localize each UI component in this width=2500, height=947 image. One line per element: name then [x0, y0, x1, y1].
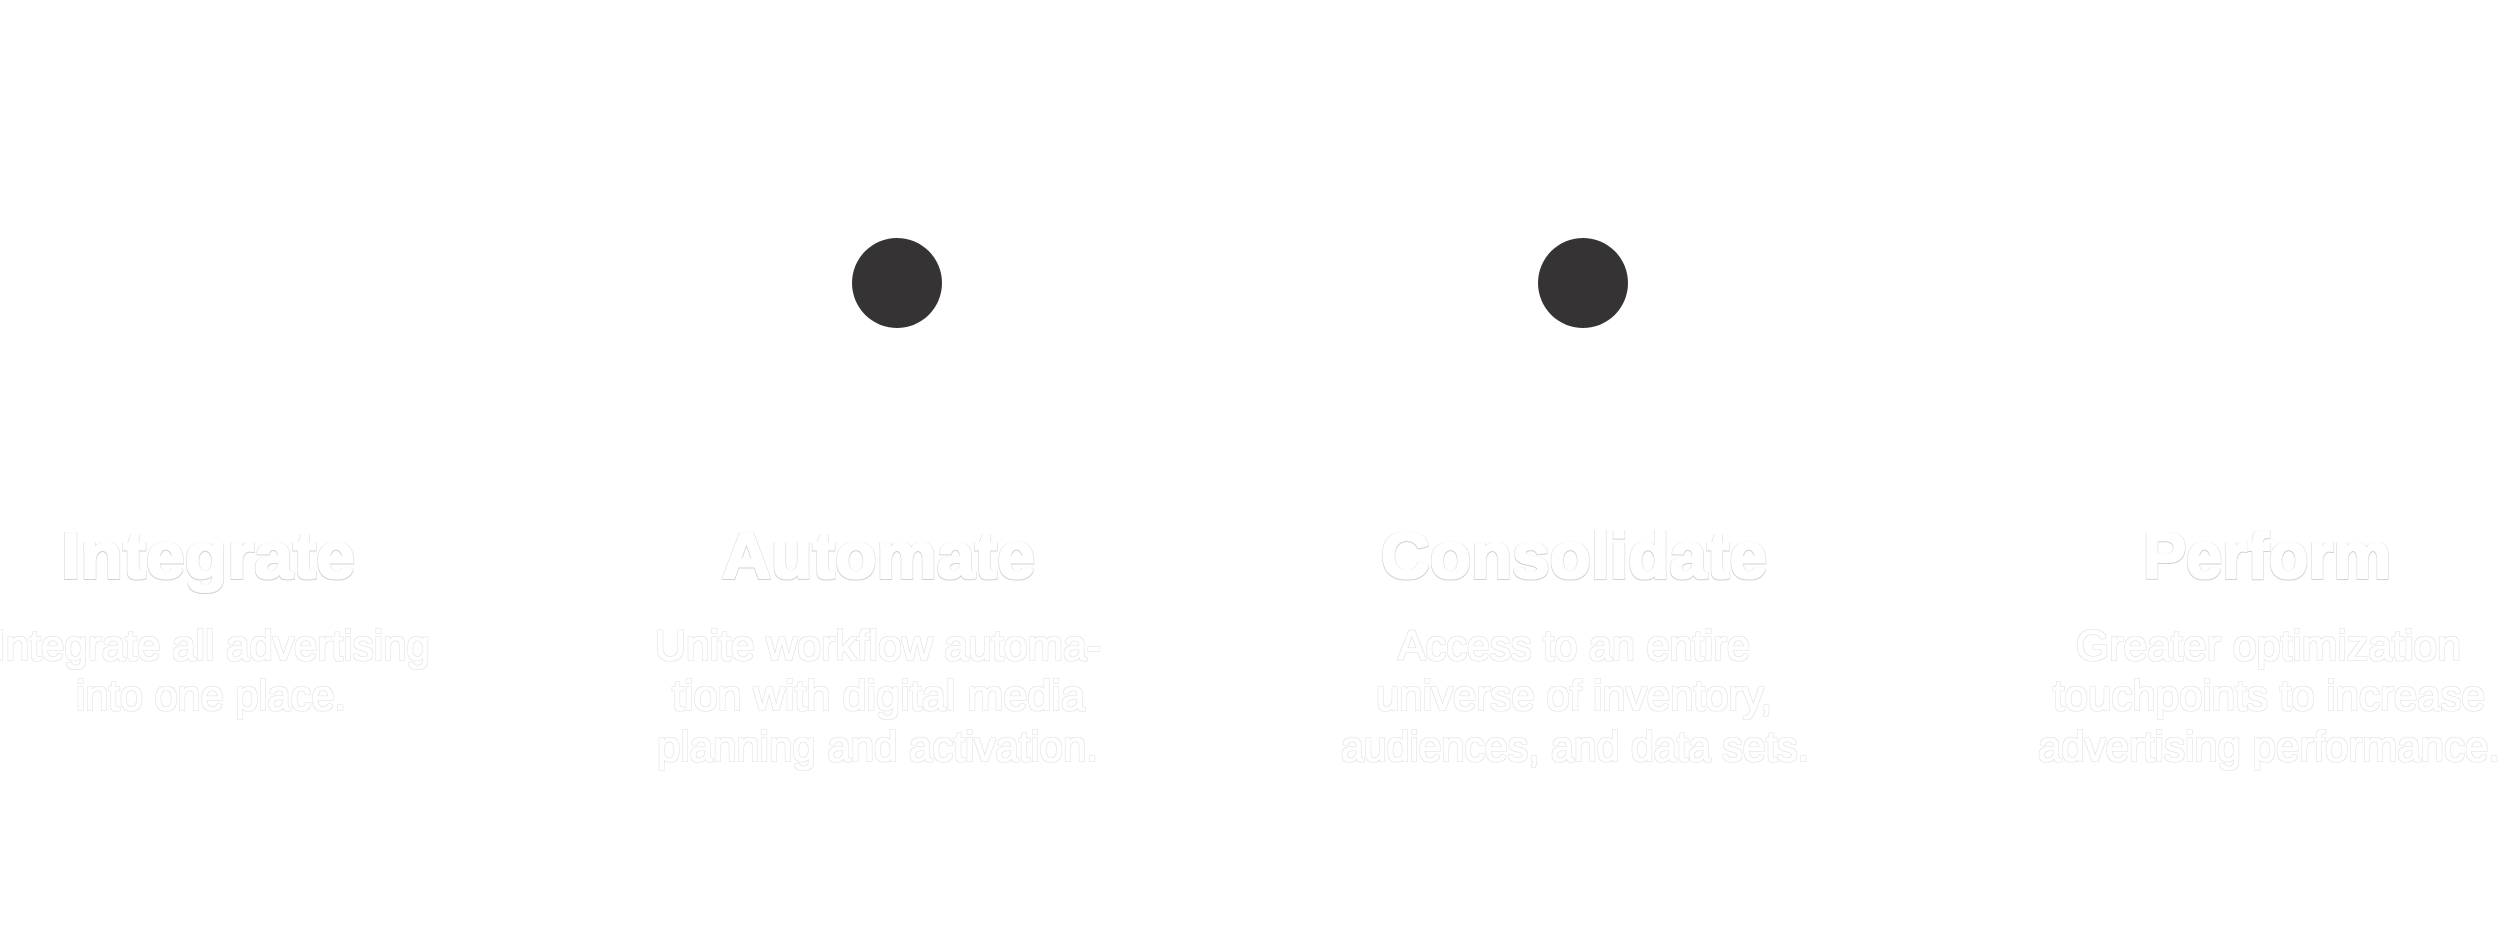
- text block: Integrate description: [0, 622, 430, 720]
- text block: Integrate description: Integrate all advertising: [0, 622, 430, 670]
- heading: Integrate: Integrate: [61, 519, 355, 592]
- text block: Automate description: planning and activation.: [657, 723, 1098, 771]
- text block: Perform description: [2038, 622, 2500, 771]
- panel: Automate: [655, 519, 1101, 771]
- icon: dark circle between Consolidate and Perform: [1538, 238, 1628, 328]
- text block: Perform description: touchpoints to increase: [2053, 672, 2485, 720]
- text block: Consolidate description: Access to an entire: [1398, 622, 1750, 670]
- panel: Integrate: [0, 519, 430, 720]
- text block: Perform description: advertising performance.: [2038, 723, 2500, 771]
- panel: Consolidate: [1341, 519, 1809, 771]
- heading: Automate: Automate: [722, 519, 1035, 592]
- text block: Automate description: Unite workflow automa-: [655, 622, 1101, 670]
- icon: dark circle between Integrate and Automate: [852, 238, 942, 328]
- text block: Perform description: Greater optimization: [2076, 622, 2461, 670]
- text block: Consolidate description: [1341, 622, 1809, 771]
- text block: Consolidate description: universe of inventory,: [1376, 672, 1772, 720]
- heading: Perform: Perform: [2143, 519, 2391, 592]
- panel: Perform: [2038, 519, 2500, 771]
- text block: Automate description: [655, 622, 1101, 771]
- heading: Consolidate: Consolidate: [1381, 519, 1767, 592]
- text block: Integrate description: into one place.: [76, 672, 346, 720]
- text block: Automate description: tion with digital media: [672, 672, 1085, 720]
- text block: Consolidate description: audiences, and data sets.: [1341, 723, 1809, 771]
